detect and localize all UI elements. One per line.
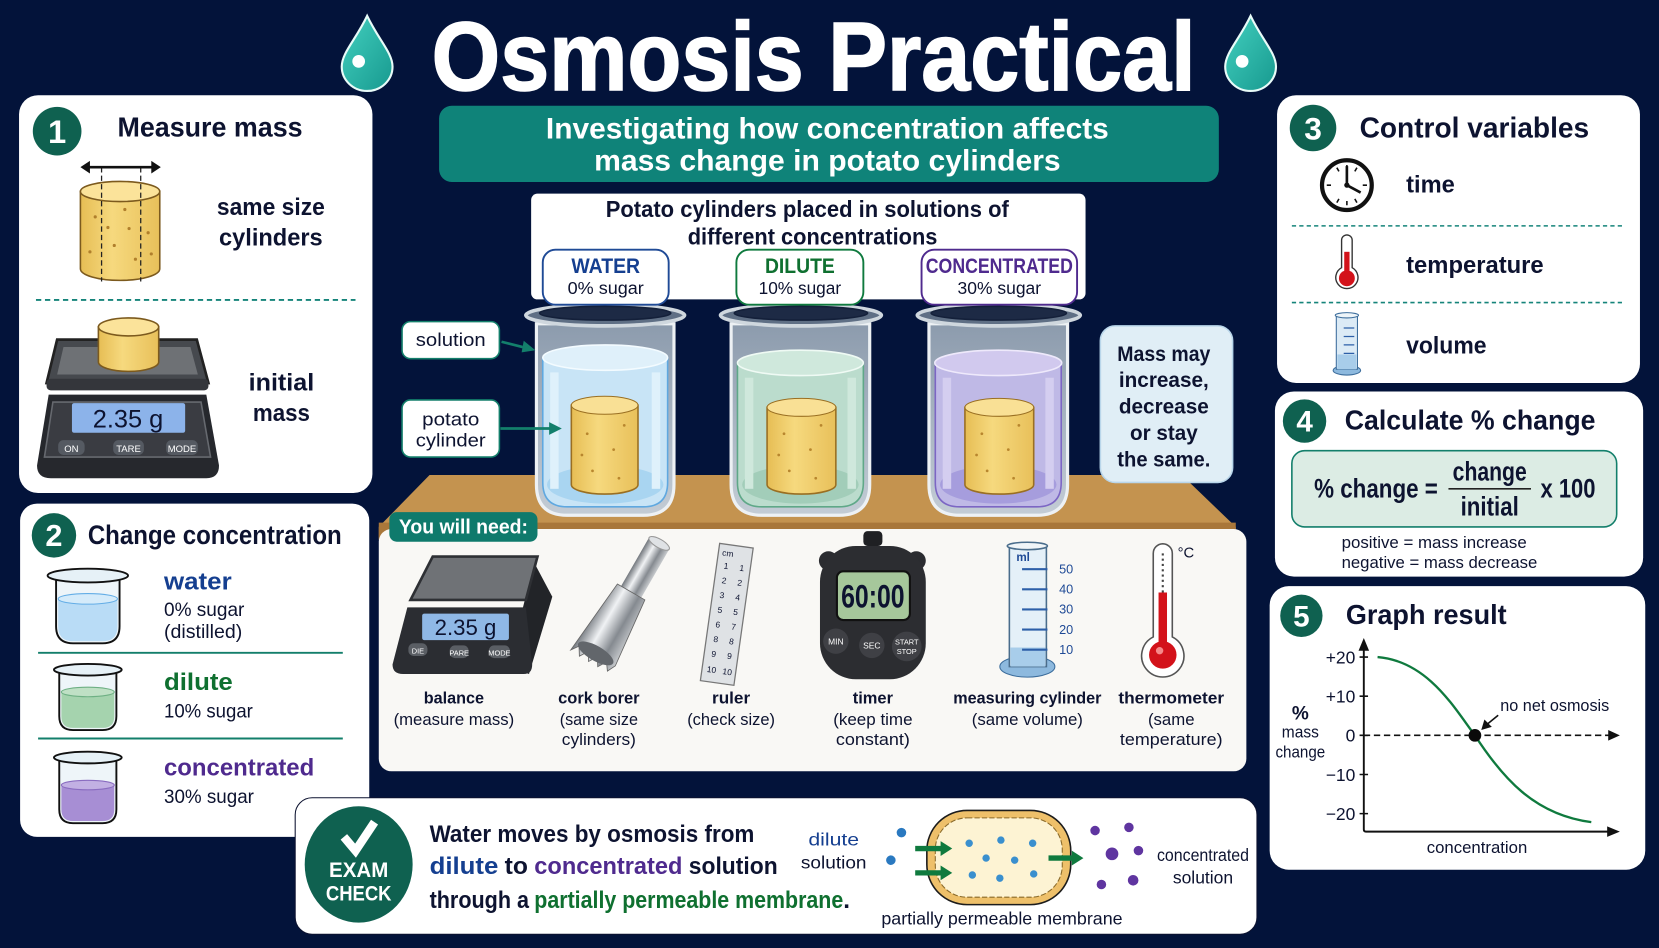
- label: water: 0% sugar: [164, 600, 245, 621]
- icon: balance with potato: 2.35 g: [93, 405, 163, 433]
- label: concentrated solution: solution: [1173, 867, 1233, 887]
- label: dilute solution: [801, 829, 867, 873]
- icon: balance with potato: MODE: [168, 444, 196, 455]
- panel: 2 change concentration: [20, 504, 369, 837]
- beaker: water: [526, 305, 685, 515]
- subtitle banner: Investigating how concentration affects: [546, 113, 1109, 146]
- icon: timer: SEC: [863, 641, 881, 651]
- line chart: mass change vs concentration: +10: [1326, 687, 1356, 707]
- label: same size cylinders: same size: [217, 194, 325, 221]
- label: same size cylinders: cylinders: [219, 224, 323, 251]
- label: dilute: dilute: [164, 669, 233, 696]
- beaker: concentrated: [917, 305, 1080, 515]
- note: positive and negative: negative = mass decrease: [1342, 553, 1537, 572]
- text: osmosis definition: through a: [430, 887, 529, 914]
- icon: measuring cylinder: 20: [1059, 623, 1073, 637]
- label: temperature: temperature: [1406, 252, 1544, 279]
- label: initial mass: [249, 369, 314, 427]
- icon: balance: PARE: [449, 648, 469, 657]
- icon: measuring cylinder: ml: [1016, 551, 1030, 564]
- badge: exam check: [305, 806, 413, 923]
- icon: measuring cylinder: 50: [1059, 562, 1073, 576]
- label: initial mass: initial: [249, 369, 314, 396]
- line chart: mass change vs concentration: %: [1292, 703, 1309, 724]
- icon: ruler: 4: [735, 592, 741, 603]
- line chart: mass change vs concentration: [1275, 638, 1620, 857]
- panel: beaker heading: Potato cylinders placed in solutions of: [606, 196, 1009, 222]
- icon: ruler: 1: [723, 561, 729, 571]
- tag: dilute: DILUTE: [765, 255, 835, 278]
- text: osmosis definition: [430, 821, 850, 914]
- heading: graph result: Graph result: [1346, 599, 1507, 630]
- icon: ruler: 5: [733, 607, 739, 617]
- label: membrane: partially permeable membrane: [881, 909, 1123, 929]
- note: positive and negative: [1342, 533, 1537, 572]
- label: concentrated solution: [1157, 845, 1249, 887]
- line chart: mass change vs concentration: concentration: [1427, 838, 1527, 857]
- icon: ruler: 10: [722, 666, 733, 677]
- callout: mass may change: Mass may: [1117, 343, 1211, 366]
- icon: cork borer: [570, 528, 681, 674]
- equipment label: ruler: ruler: [712, 689, 751, 708]
- equipment label: measuring cylinder: (same volume): [972, 710, 1083, 729]
- formula box: change: [1453, 456, 1527, 486]
- heading: control variables: Control variables: [1360, 113, 1589, 145]
- label: dilute solution: dilute: [808, 829, 859, 849]
- formula box: x 100: [1540, 473, 1596, 503]
- icon: ruler: [700, 543, 753, 685]
- equipment label: balance: [394, 689, 514, 729]
- step number 2: [32, 513, 76, 558]
- formula box: [1292, 451, 1617, 527]
- icon: ruler: 6: [715, 619, 721, 630]
- icon: water beaker: [48, 569, 128, 643]
- line chart: mass change vs concentration: no net osmosis: [1500, 696, 1609, 715]
- text: osmosis definition: Water moves by osmosis from: [430, 821, 754, 848]
- icon: right water drop: [1225, 16, 1276, 91]
- equipment label: cork borer: cylinders): [562, 730, 636, 749]
- icon: ruler: 2: [737, 577, 743, 588]
- icon: dilute beaker: [54, 664, 122, 730]
- panel: beaker heading: [531, 194, 1086, 299]
- panel: 3 control variables: [1277, 95, 1640, 383]
- callout: mass may change: [1100, 326, 1233, 482]
- badge: exam check: EXAM: [329, 859, 388, 882]
- step number 5: [1280, 595, 1323, 637]
- icon: thermometer: °C: [1178, 546, 1195, 562]
- icon: thermometer: [1142, 544, 1195, 677]
- step number 4: [1283, 399, 1326, 443]
- subtitle banner: mass change in potato cylinders: [594, 144, 1061, 177]
- label: concentrated solution: concentrated: [1157, 845, 1249, 865]
- tag: water: 0% sugar: [568, 278, 644, 298]
- icon: ruler: 1: [739, 563, 745, 573]
- line chart: mass change vs concentration: +20: [1326, 647, 1356, 667]
- panel: exam check: [295, 798, 1257, 934]
- equipment label: thermometer: thermometer: [1118, 689, 1225, 708]
- label: water: [163, 568, 245, 643]
- icon: timer: MIN: [828, 636, 844, 646]
- callout: mass may change: or stay: [1130, 422, 1198, 445]
- callout: mass may change: increase,: [1119, 369, 1209, 392]
- label: potato cylinder: [402, 400, 499, 457]
- label: time: time: [1406, 172, 1455, 199]
- step number 1: 1: [48, 113, 66, 150]
- icon: ruler: 3: [719, 590, 725, 600]
- icon: ruler: 5: [717, 605, 723, 615]
- label: concentrated: 30% sugar: [164, 787, 255, 808]
- tag: concentrated: [922, 250, 1077, 305]
- text: osmosis definition: .: [843, 887, 850, 914]
- equipment label: timer: [833, 689, 913, 749]
- label: potato cylinder: potato: [422, 408, 479, 429]
- icon: balance: MODE: [488, 648, 511, 657]
- icon: measuring cylinder: 40: [1059, 583, 1073, 597]
- badge: you will need: [389, 512, 537, 542]
- text: osmosis definition: dilute: [430, 853, 498, 880]
- icon: timer: STOP: [897, 647, 917, 656]
- icon: measuring cylinder: 10: [1059, 643, 1073, 657]
- icon: balance with potato: TARE: [116, 444, 141, 455]
- callout: mass may change: decrease: [1119, 396, 1209, 419]
- equipment label: balance: balance: [424, 689, 484, 708]
- label: potato cylinder: cylinder: [416, 429, 486, 450]
- step number 4: 4: [1296, 406, 1313, 439]
- heading: measure mass: Measure mass: [117, 111, 303, 142]
- formula box: % change =: [1314, 473, 1438, 503]
- label: volume: volume: [1406, 332, 1487, 359]
- equipment label: timer: timer: [853, 689, 893, 708]
- icon: concentrated beaker: [54, 752, 122, 823]
- diagram: partially permeable membrane: [886, 810, 1143, 905]
- icon: small measuring cylinder: [1333, 313, 1361, 375]
- label: same size cylinders: [217, 194, 325, 251]
- equipment label: ruler: [687, 689, 775, 729]
- arrow: potato cylinder: [500, 422, 562, 435]
- equipment label: timer: constant): [836, 730, 910, 749]
- line chart: mass change vs concentration: −10: [1326, 765, 1356, 785]
- equipment label: thermometer: temperature): [1120, 730, 1223, 749]
- icon: balance with potato: [37, 318, 219, 478]
- line chart: mass change vs concentration: −20: [1326, 804, 1356, 824]
- beaker: dilute: [721, 305, 881, 515]
- tag: dilute: [736, 250, 863, 305]
- step number 2: 2: [45, 518, 62, 553]
- arrow: solution: [502, 341, 535, 352]
- badge: exam check: CHECK: [326, 882, 392, 905]
- icon: clock: [1322, 160, 1372, 210]
- potato cylinder in water: [571, 396, 638, 494]
- icon: ruler: 9: [711, 649, 717, 659]
- equipment label: thermometer: (same: [1148, 710, 1195, 729]
- panel: 1 measure mass: [19, 95, 372, 493]
- potato cylinder in concentrated: [965, 398, 1034, 494]
- label: water: water: [163, 568, 232, 595]
- icon: timer: START: [895, 637, 919, 646]
- equipment label: cork borer: (same size: [560, 710, 638, 729]
- icon: ruler: cm: [722, 547, 734, 559]
- heading: change concentration: Change concentration: [88, 520, 342, 550]
- line chart: mass change vs concentration: change: [1275, 744, 1325, 762]
- tag: water: [543, 250, 669, 305]
- equipment label: ruler: (check size): [687, 710, 775, 729]
- text: osmosis definition: partially permeable membrane: [534, 887, 843, 914]
- label: dilute: [164, 669, 254, 722]
- text: osmosis definition: concentrated: [534, 853, 682, 880]
- text: osmosis definition: to: [505, 853, 528, 880]
- panel: 5 graph result: [1270, 586, 1645, 870]
- icon: balance: DIE: [412, 646, 424, 655]
- text: osmosis definition: solution: [689, 853, 778, 880]
- icon: measuring cylinder: [1000, 542, 1073, 677]
- icon: small thermometer: [1336, 235, 1358, 289]
- step number 1: [33, 107, 81, 156]
- tag: concentrated: CONCENTRATED: [926, 255, 1073, 278]
- tag: water: WATER: [571, 255, 640, 278]
- tag: concentrated: 30% sugar: [958, 278, 1041, 298]
- icon: ruler: 10: [706, 664, 717, 675]
- icon: ruler: 8: [729, 636, 735, 647]
- badge: you will need: You will need:: [399, 516, 528, 538]
- wooden bench: [379, 475, 1236, 540]
- icon: balance: 2.35 g: [435, 615, 496, 640]
- label: water: (distilled): [164, 622, 242, 643]
- icon: left water drop: [342, 16, 393, 91]
- icon: measuring cylinder: 30: [1059, 603, 1073, 617]
- label: initial mass: mass: [253, 400, 310, 427]
- tag: dilute: 10% sugar: [759, 278, 841, 298]
- label: solution: solution: [416, 329, 486, 350]
- subtitle banner: [439, 106, 1219, 182]
- formula box: initial: [1461, 491, 1519, 521]
- potato cylinder in dilute: [767, 398, 836, 494]
- icon: ruler: 9: [726, 651, 733, 661]
- equipment label: cork borer: [558, 689, 640, 749]
- title: Osmosis Practical: [432, 2, 1196, 111]
- line chart: mass change vs concentration: 0: [1346, 726, 1356, 746]
- callout: mass may change: the same.: [1117, 449, 1210, 472]
- icon: ruler: 2: [721, 575, 727, 586]
- step number 3: 3: [1304, 111, 1322, 147]
- heading: calculate % change: Calculate % change: [1345, 405, 1596, 436]
- note: positive and negative: positive = mass increase: [1342, 533, 1527, 552]
- icon: ruler: 7: [731, 621, 737, 632]
- equipment label: timer: (keep time: [833, 710, 913, 729]
- equipment label: cork borer: cork borer: [558, 689, 640, 708]
- equipment label: thermometer: [1118, 689, 1225, 749]
- line chart: mass change vs concentration: mass: [1282, 723, 1319, 741]
- icon: potato cylinder with size arrow: [80, 161, 161, 281]
- icon: balance: [393, 557, 552, 674]
- icon: balance with potato: ON: [64, 444, 79, 455]
- icon: timer: 60:00: [841, 577, 905, 614]
- icon: timer: [819, 531, 926, 679]
- step number 5: 5: [1293, 600, 1310, 633]
- equipment label: measuring cylinder: measuring cylinder: [953, 689, 1102, 708]
- label: concentrated: concentrated: [164, 755, 314, 782]
- icon: ruler: 8: [713, 634, 719, 644]
- panel: beaker heading: different concentrations: [688, 223, 937, 249]
- step number 3: [1290, 105, 1336, 151]
- label: concentrated: [164, 755, 314, 808]
- label: dilute solution: solution: [801, 853, 867, 873]
- panel: you will need: [379, 512, 1246, 771]
- label: dilute: 10% sugar: [164, 701, 254, 722]
- equipment label: measuring cylinder: [953, 689, 1102, 729]
- panel: 4 calculate % change: [1275, 391, 1643, 577]
- equipment label: balance: (measure mass): [394, 710, 514, 729]
- label: solution: [402, 322, 499, 359]
